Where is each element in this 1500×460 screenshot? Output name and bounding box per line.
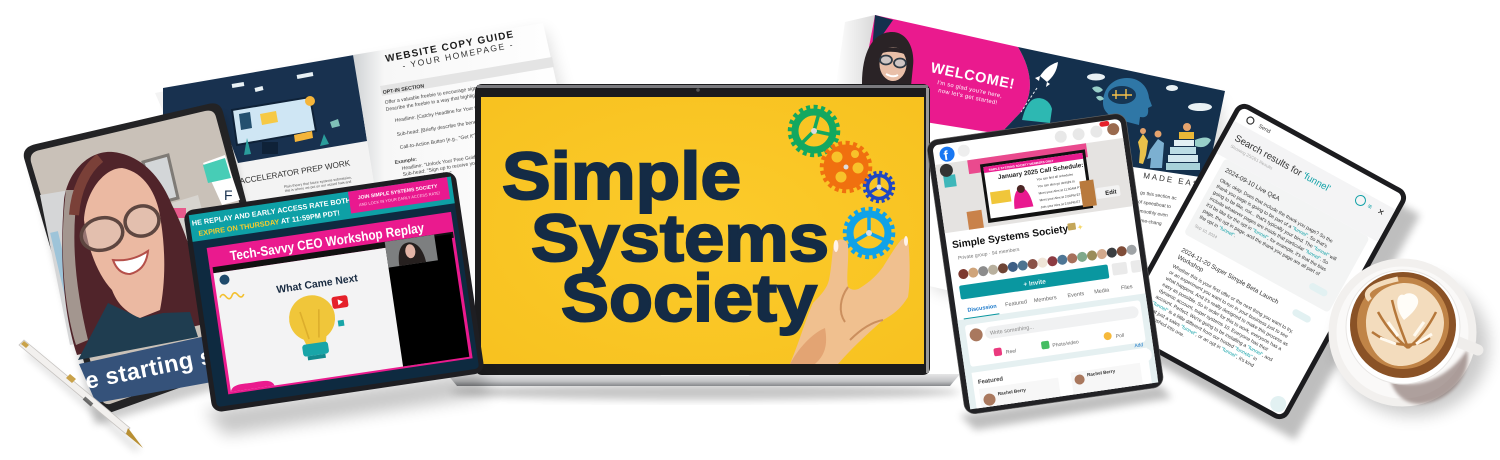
group tabs: Media [1094, 287, 1111, 296]
privacy line: Private group · 94 members [958, 247, 1020, 262]
cup [1346, 270, 1460, 384]
welcome subtext: now let's get started! [938, 88, 998, 107]
slide heading: What Came Next [276, 272, 359, 296]
decorative squiggles [220, 292, 244, 300]
pink blob [230, 379, 274, 392]
gear: orange [822, 143, 870, 191]
feed background [957, 293, 1158, 409]
illustration: people and books [1138, 123, 1211, 170]
small page text: this is where we put on our wizard hats and [285, 180, 352, 193]
tablet frame [926, 112, 1164, 415]
hand holding gear [790, 236, 910, 364]
left workbook [155, 23, 575, 340]
screen [932, 119, 1158, 409]
search header band [1216, 121, 1396, 242]
booklet page text: gs this section ac [1140, 190, 1178, 202]
latte art [1366, 279, 1444, 366]
group tabs: Featured [1005, 299, 1027, 308]
opt-in body text: medi [449, 220, 461, 228]
title text: Tech-Savvy CEO Workshop Replay [229, 220, 426, 264]
icon: light bulb [286, 292, 341, 362]
top [78, 303, 198, 360]
cover teal note [943, 174, 957, 188]
opt-in body text [384, 84, 488, 235]
illustration: clouds [1087, 74, 1212, 111]
result card one: page, the opt in page, and the thank you page are all part of [1202, 208, 1321, 278]
illustration: head with ideas [1092, 78, 1152, 125]
result card two [1133, 239, 1325, 406]
cup handle [1456, 341, 1478, 350]
composer card: Reel [1006, 348, 1017, 356]
group tabs: Members [1034, 295, 1057, 304]
cover monitor: SIMPLE SYSTEMS SOCIETY MEMBERS ONLY [988, 159, 1054, 172]
tablet frame [183, 171, 485, 413]
floating compose button [1137, 347, 1153, 363]
teal blob [1022, 98, 1052, 123]
cover monitor: You can find all schedules [1036, 172, 1074, 182]
smile [113, 251, 148, 274]
coffee cup and saucer [1328, 258, 1489, 416]
floating button [1267, 393, 1289, 415]
title: simple systems society: Systems [531, 201, 829, 276]
group tabs: Discussion [967, 304, 998, 314]
booklet spine [835, 15, 875, 92]
navy corner [872, 15, 893, 50]
result card two: "funnel" is a little different from our hosted "funnels" in [1151, 300, 1258, 363]
composer card: Write something... [990, 324, 1035, 337]
result card two: account. Perfect. We're going to be installing a "funnel", and [1154, 294, 1274, 363]
tablet frame [1114, 100, 1410, 423]
cover monitor: Meet your Alex at 11:00AM PT [1038, 185, 1082, 195]
tablet frame [24, 103, 285, 413]
icon: play button [331, 295, 349, 309]
slide [213, 244, 426, 392]
cover monitor: Meet your Alex at 2:00PM ET [1039, 192, 1081, 202]
welcome subtext: I'm so glad you're here, [937, 80, 1003, 100]
laptop [447, 84, 960, 400]
opt-in body text: or co [444, 208, 457, 216]
video header [213, 232, 454, 273]
icon: facebook [939, 146, 956, 164]
lock and sparkles [1067, 221, 1085, 234]
illustration: website on billboard [232, 74, 340, 155]
featured section: Rachel Berry [1087, 368, 1116, 377]
result card one: it'd be like for the opt in "funnel", for example, it's that the bias [1205, 202, 1328, 273]
join button [348, 177, 450, 213]
featured section: Rachel Berry [997, 387, 1027, 396]
caption banner [79, 336, 212, 403]
opt-in body text: Sub-head: [Briefly describe the benefit] [396, 118, 483, 138]
gift boxes [1079, 180, 1097, 207]
heading: made easy: MADE EASY [1143, 171, 1208, 190]
booklet page text [1135, 190, 1178, 227]
subheading: your homepage: - YOUR HOMEPAGE - [401, 40, 513, 71]
booklet page text: game-chang [1135, 217, 1162, 227]
opt-in body text: Call-to-Action Button [e.g., "Get It"] [399, 133, 477, 151]
screen [1121, 107, 1403, 416]
lock and sparkles: ✦ [1076, 222, 1085, 232]
result card one: Sep 10, 2024 [1194, 223, 1219, 240]
close controls: ≡ [1366, 203, 1373, 211]
pen [19, 340, 143, 450]
black participant column [385, 234, 469, 367]
title: simple systems society: Society [561, 261, 817, 336]
caption text: e starting sl [83, 341, 222, 394]
cover pink wall [967, 143, 1088, 174]
face [84, 168, 164, 318]
shelf [40, 155, 210, 345]
result card two: what happens. And it's really designed to make this process as [1164, 276, 1289, 348]
cover monitor [980, 149, 1093, 223]
header icons [1054, 119, 1120, 144]
teal announcement bar [189, 177, 455, 242]
booklet page text: of speedboat to [1138, 199, 1172, 210]
laptop screen [481, 97, 924, 364]
photo background [31, 111, 278, 404]
group title: Simple Systems Society [951, 224, 1069, 251]
teal notebook: F [224, 187, 233, 203]
result card one: include whatever pages are inside that particular "funnel". So [1208, 196, 1329, 266]
cover monitor: Join your Alex at 2:00PM ET [1040, 200, 1081, 209]
cover orange item [967, 210, 984, 230]
edit button [1095, 185, 1121, 199]
opt-in body text: Describe the freebie in a way that highlights [385, 92, 482, 113]
result card two: that just a sales "funnel", or an opt in "funnel", it's kind [1148, 306, 1255, 369]
pen barrel [19, 340, 130, 434]
result card two: Whether this is your first offer or the next thing you want to try, [1171, 263, 1294, 335]
avatar dot [219, 274, 230, 285]
small page text: Plain theory that future systems submission, [284, 175, 352, 189]
hair [62, 152, 201, 355]
result card two: or an experiment you want to run in your business just to see [1168, 270, 1289, 340]
search title: Search results for 'funnel' [1233, 133, 1332, 195]
dark illustration header [163, 55, 367, 163]
opt-in section band: OPT-IN SECTION [382, 83, 425, 96]
result card one: 2024-09-10 Live Q&A [1224, 167, 1282, 203]
member avatars [958, 244, 1137, 280]
result card one: Okay, okay. Does that include the thank you page? So the [1218, 178, 1334, 245]
title: simple systems society: Simple [502, 139, 741, 214]
opt-in body text: Offer a valuable freebie to encourage sign-ups. [384, 84, 488, 106]
join button: JOIN SIMPLE SYSTEMS SOCIETY [358, 184, 439, 201]
result card two: smooshed into one. [1144, 313, 1185, 339]
teal notebook [203, 155, 240, 205]
opt-in body text: Sub-head: "Sign up to receive your [402, 160, 480, 178]
workbook left page [155, 55, 380, 230]
edit button: Edit [1105, 189, 1117, 197]
icon: search circle [957, 144, 971, 158]
coffee [1350, 272, 1456, 378]
gear: light blue [845, 209, 893, 257]
group tabs [967, 284, 1133, 314]
pen clip shade [84, 398, 92, 405]
gear: green [790, 107, 838, 155]
join button: AND LOCK IN YOUR EARLY ACCESS RATE! [359, 190, 440, 207]
cup shadow on saucer [1390, 350, 1468, 404]
laptop base [447, 374, 960, 386]
opt-in body text: CATION [439, 190, 459, 199]
opt-in body text: ifly. Us [444, 202, 460, 210]
opt-in body text: Headline: "Unlock Your Free Guide" [401, 154, 481, 172]
icon: facebook: f [943, 147, 950, 163]
pink side edges [210, 232, 473, 394]
navy screen [189, 177, 479, 407]
cover photo [935, 138, 1133, 233]
opt-in body text: Example: [394, 157, 418, 166]
icon: search [1246, 116, 1255, 125]
pen nib [126, 428, 143, 448]
opt-in body text: Headline: [Catchy Headline for Your Offer] [394, 103, 488, 124]
result card two: Workshop [1176, 254, 1205, 274]
booklet page text: smoothly even [1137, 208, 1169, 219]
add link: Add [1134, 342, 1144, 349]
saucer [1328, 258, 1476, 406]
search and more buttons [1111, 260, 1142, 276]
welcome heading: WELCOME! [929, 60, 1016, 93]
webcam presenter [385, 235, 438, 268]
result card one: the opt in "funnel". [1198, 214, 1237, 239]
result card two: dynamic account, super systems 10. Everyone has their [1158, 288, 1270, 353]
teal square [338, 320, 344, 327]
cover dark icon [939, 163, 954, 178]
active tab underline [964, 313, 1000, 320]
composer card [965, 300, 1146, 367]
result card one: going to be like, not... that's typically your bind. The "funnel" will [1212, 190, 1337, 263]
group tabs: Events [1067, 291, 1085, 299]
result card two: 2024-11-20 Super Simple Beta Launch [1180, 247, 1280, 306]
booklet white pages [862, 84, 1215, 340]
pink title bar [207, 212, 454, 269]
featured section: Featured [978, 376, 1004, 386]
result card one: thank you page is going to be part of a "funnel". So that's [1215, 184, 1329, 250]
right booklet [835, 15, 1230, 340]
cover monitor: You can also go straight to [1037, 179, 1075, 189]
invite button: + Invite [1023, 278, 1047, 289]
pink book [172, 208, 186, 218]
send label: Send [1257, 124, 1271, 135]
pink welcome panel [862, 15, 1030, 134]
portrait of woman [862, 32, 913, 86]
invite button [959, 264, 1109, 300]
close controls [1354, 194, 1386, 218]
composer card: Photo/video [1052, 339, 1079, 349]
title: simple systems society [502, 139, 829, 336]
tablet: workshop replay [183, 171, 490, 435]
announcement line 2: EXPIRE ON THURSDAY AT 11:59PM PDT! [198, 208, 340, 238]
opt-in body text: ocial [449, 227, 460, 235]
icon: rocket [1021, 62, 1058, 112]
opt-in body text: guide and start today" [403, 170, 452, 184]
results count: Showing 25/261 Results [1230, 144, 1274, 171]
gear: dark blue [864, 172, 894, 202]
result card one [1184, 158, 1370, 313]
workbook right page [353, 23, 575, 340]
announcement line 1: HE REPLAY AND EARLY ACCESS RATE BOTH [191, 195, 352, 228]
heading: website copy guide: WEBSITE COPY GUIDE [384, 29, 515, 65]
result card two: easy as possible. So in order for this to work, everyone has a [1161, 282, 1283, 352]
glasses [78, 202, 162, 255]
opt-in section band [380, 57, 554, 96]
cover monitor: January 2025 Call Schedule: [997, 162, 1084, 181]
dark booklet header [1000, 47, 1225, 178]
tablet: facebook group [926, 112, 1172, 430]
composer card: Poll [1115, 333, 1125, 340]
rotated tablet body [183, 171, 485, 413]
tablet: video of presenter [24, 103, 285, 425]
close controls: ✕ [1376, 207, 1386, 218]
group tabs: Files [1121, 284, 1133, 292]
pen gold bands [21, 341, 76, 383]
laptop lid [475, 84, 930, 375]
heading: accelerator prep work: ACCELERATOR PREP WORK [239, 159, 351, 186]
featured section [972, 348, 1152, 409]
tablet: transcript search [1114, 100, 1420, 440]
